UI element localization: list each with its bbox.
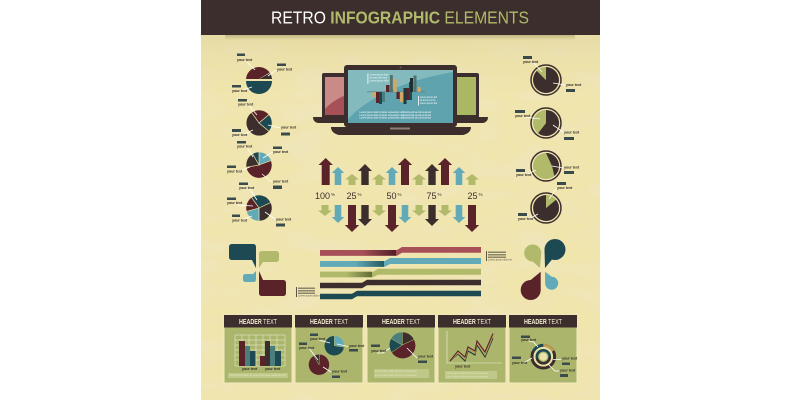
pie chart 3: your text — [273, 150, 289, 154]
pie chart 1: your text — [237, 58, 253, 62]
percentage labels: % — [398, 192, 402, 197]
panel: single pie: Lorem ipsum dolor sit amet consectetur — [375, 374, 417, 377]
gauge 3: your text — [564, 166, 580, 170]
panel: ring chart: your text — [512, 361, 528, 365]
pie chart 4 — [227, 182, 292, 226]
speech bubbles left — [229, 244, 286, 296]
pie chart 4: your text — [239, 186, 255, 190]
pie chart 3 — [227, 141, 289, 189]
gauge 1: your text — [566, 83, 582, 87]
percentage labels: 100 — [315, 191, 330, 201]
percentage labels — [315, 191, 483, 201]
pie chart 3: your text — [237, 144, 253, 148]
gauge 2 — [515, 108, 580, 140]
screen text blocks: sit amet text he — [420, 99, 436, 102]
pie chart 4: your text — [276, 218, 292, 222]
pie chart 2: your text — [238, 102, 254, 106]
screen text blocks: Lorem ipsum dolor sit amet consectetur adipiscing elit sed do eiusmod — [360, 114, 432, 117]
panel: line chart: Lorem ipsum dolor sit amet consectetur — [446, 372, 488, 375]
pie chart 2 — [232, 99, 297, 137]
percentage labels: % — [358, 192, 362, 197]
panel: single pie: HEADER TEXT — [382, 319, 421, 326]
pie chart 4: your text — [232, 218, 248, 222]
pie chart 2: your text — [281, 126, 297, 130]
panel: single pie: Lorem ipsum dolor sit amet consectetur — [375, 370, 417, 373]
header band with title — [201, 0, 600, 35]
gauge 2: your text — [564, 130, 580, 134]
percentage labels: 25 — [346, 191, 357, 201]
percentage labels: % — [479, 192, 483, 197]
main laptop — [331, 65, 471, 135]
panel: ring chart: HEADER TEXT — [524, 319, 563, 326]
pie chart 1 — [232, 54, 293, 94]
panel: two pies: your text — [299, 346, 315, 350]
panel: single pie: your text — [418, 354, 434, 358]
panel: bar chart: your text — [242, 367, 258, 371]
panel: bar chart — [224, 315, 292, 383]
percentage labels: % — [438, 192, 442, 197]
panel: ring chart: your text — [521, 338, 537, 342]
left laptop — [313, 73, 352, 123]
poster background — [201, 0, 600, 400]
band chart note left — [296, 287, 322, 298]
pie chart 1: your text — [277, 68, 293, 72]
chart grid — [235, 335, 285, 366]
gauge 4 — [518, 182, 573, 223]
screen text blocks: Lorem ipsum dolor sit amet consectetur adipiscing elit sed do eiusmod — [360, 111, 432, 114]
percentage labels: 75 — [426, 191, 437, 201]
screen text blocks: sit amet text here — [370, 76, 388, 80]
percentage labels: % — [331, 192, 335, 197]
pie chart 4: your text — [227, 201, 243, 205]
panel: ring chart: your text — [560, 368, 576, 372]
bars — [239, 341, 281, 366]
down arrows — [318, 205, 479, 232]
laptop illustration — [313, 65, 488, 135]
percentage labels: 25 — [468, 191, 478, 201]
panel: ring chart: your text — [562, 356, 578, 360]
panel: ring chart — [509, 315, 578, 383]
screen text blocks: Lorem ipsum dol — [420, 96, 437, 99]
screen text blocks: Lorem ipsum dol — [420, 102, 437, 105]
band chart note right — [486, 251, 512, 262]
striped band chart — [320, 247, 481, 299]
panel: bar chart: Lorem ipsum dolor sit amet consectetur adipiscing elit — [229, 374, 286, 377]
pie — [389, 332, 416, 359]
up arrows — [318, 158, 479, 185]
gauge 1 — [523, 56, 582, 95]
rings — [532, 345, 555, 368]
panel: two pies: your text — [332, 370, 348, 374]
screen text blocks: Lorem ipsum dolor — [370, 74, 389, 76]
panel: bar chart: HEADER TEXT — [239, 319, 278, 326]
panel: single pie — [367, 315, 435, 383]
percentage labels: 50 — [386, 191, 397, 201]
screen text blocks — [360, 74, 437, 120]
panel: line chart — [438, 315, 506, 383]
round speech bubbles right — [521, 239, 566, 300]
gauge 4: your text — [557, 186, 573, 190]
gauge 2: your text — [515, 114, 531, 118]
panel: line chart: HEADER TEXT — [453, 319, 492, 326]
panel: two pies: your text — [310, 337, 326, 341]
panel: two pies — [295, 315, 365, 383]
panel: two pies: your text — [349, 344, 365, 348]
pie chart 2: your text — [232, 133, 248, 137]
band chart note left: Lorem ipsum dolor sit — [298, 294, 322, 298]
panel: line chart: Lorem ipsum dolor sit amet consectetur — [446, 376, 488, 378]
pie chart 1: your text — [232, 89, 248, 93]
band chart note right: Lorem ipsum dolor sit — [488, 258, 512, 262]
gauge 3: your text — [516, 173, 532, 177]
right laptop — [450, 73, 488, 123]
panel: line chart: your text — [455, 364, 471, 368]
lines — [450, 334, 493, 361]
pie chart 3: your text — [273, 180, 289, 184]
panel: bar chart: your text — [265, 367, 281, 371]
teal pie — [324, 336, 344, 356]
screen text blocks: Lorem ipsum dolor sit amet consectetur adipiscing elit sed do eiusmod — [360, 117, 432, 120]
panel: single pie: your text — [371, 349, 387, 353]
pie chart 3: your text — [227, 170, 243, 174]
gauge 3 — [516, 151, 580, 181]
panel: two pies: HEADER TEXT — [310, 319, 349, 326]
screen text blocks: Lorem ipsum dolor — [370, 80, 389, 82]
gauge 1: your text — [523, 60, 539, 64]
maroon pie — [308, 354, 329, 375]
header band with title: RETRO INFOGRAPHIC ELEMENTS — [271, 8, 529, 28]
screen bar chart — [367, 75, 425, 104]
gauge 4: your text — [518, 217, 534, 221]
